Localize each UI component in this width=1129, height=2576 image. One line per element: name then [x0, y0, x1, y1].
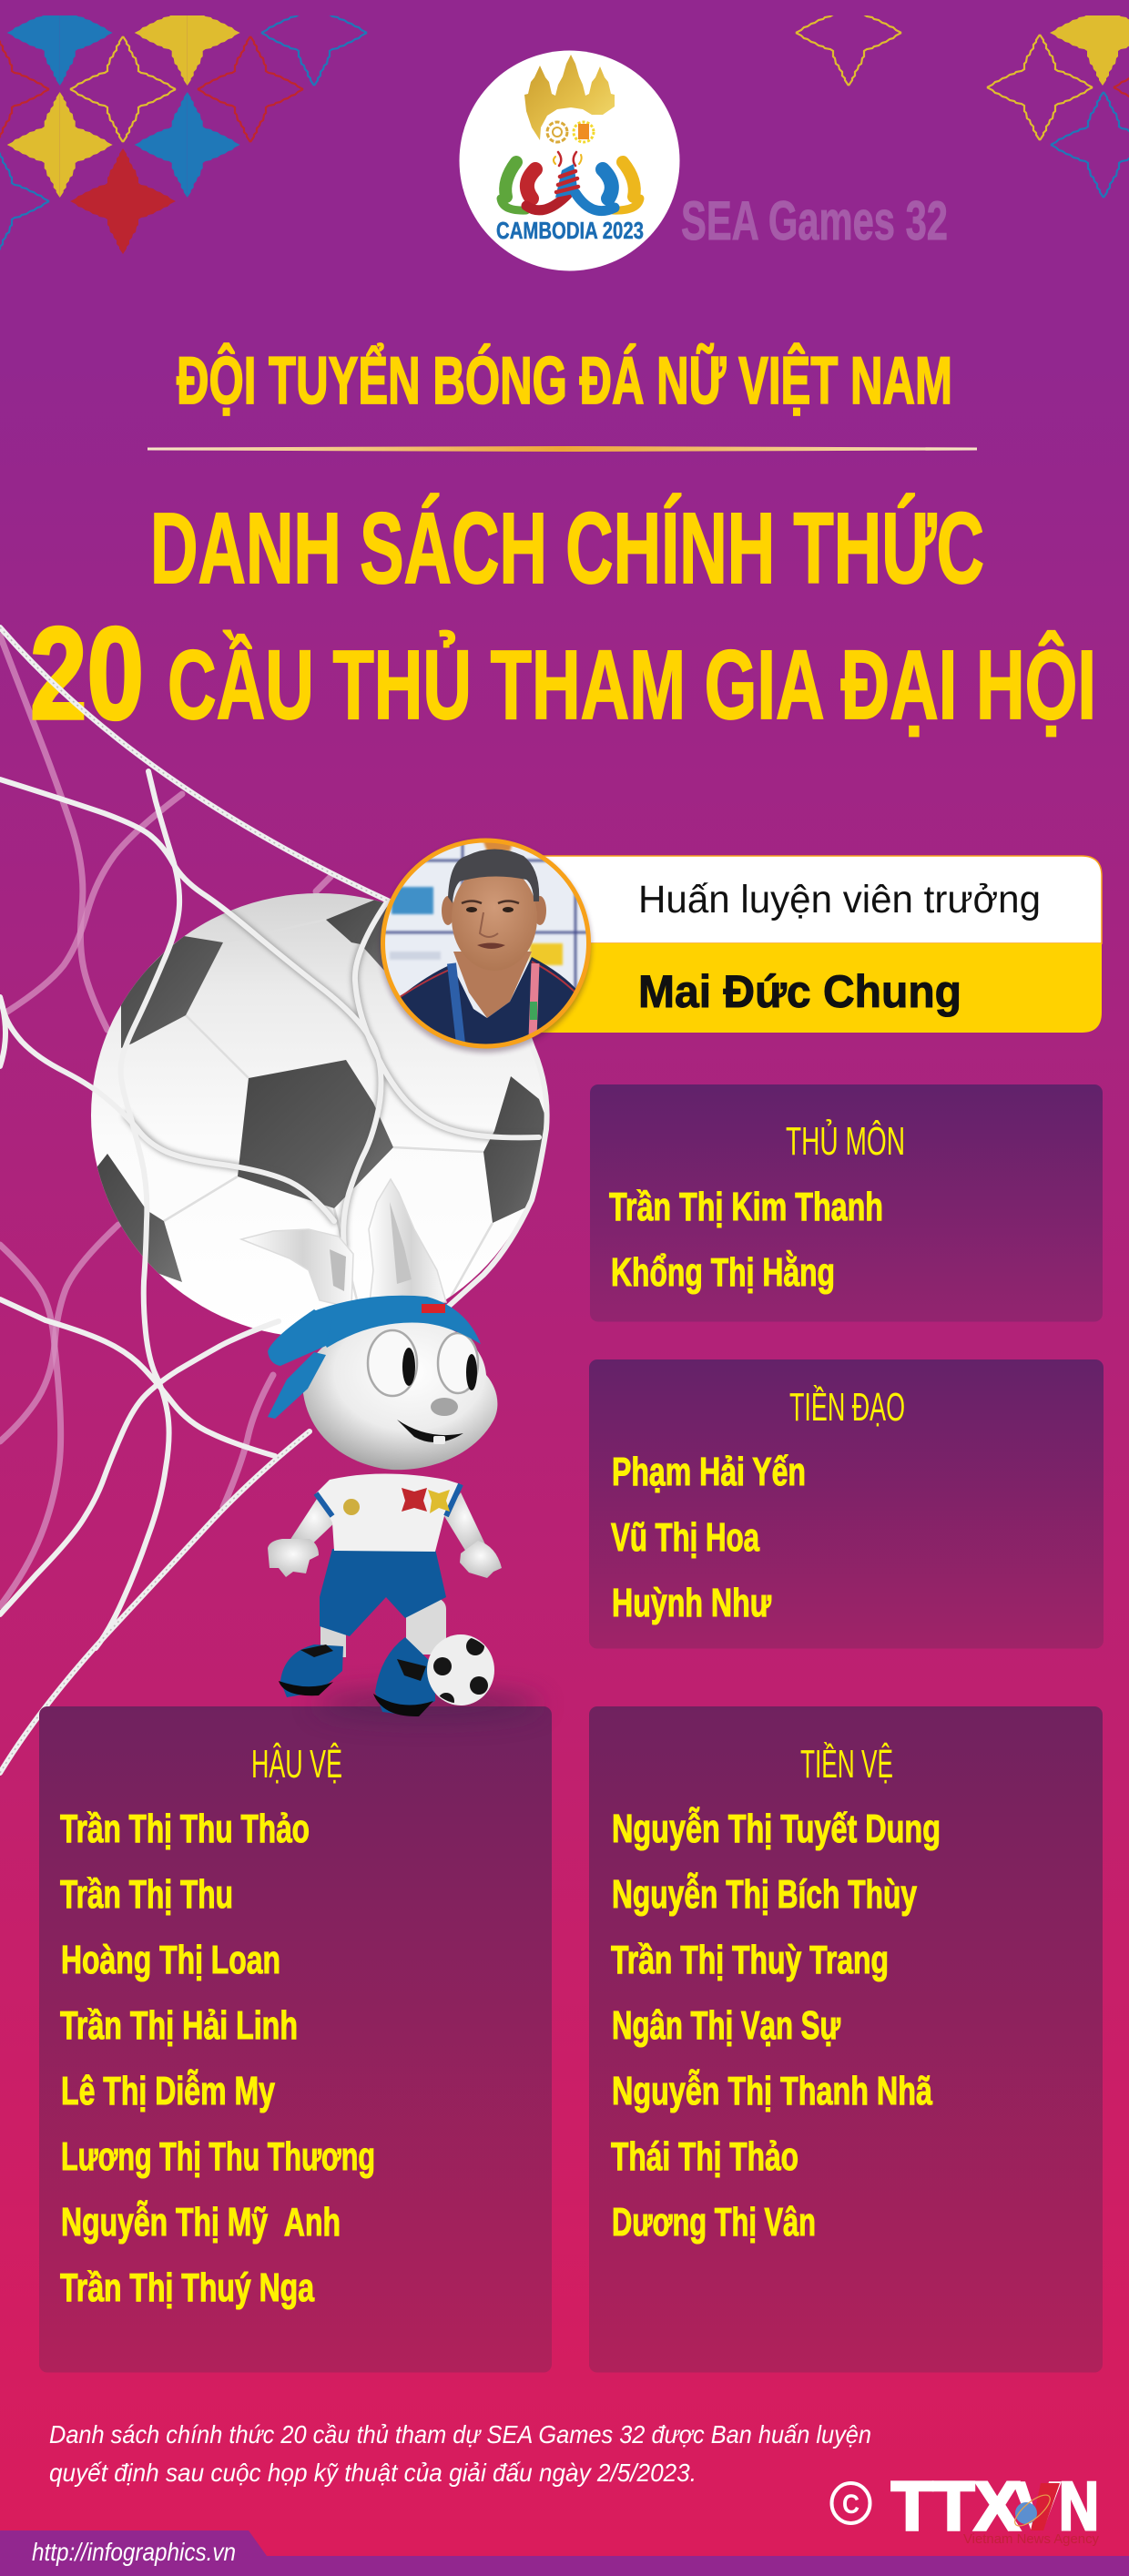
agency wordmark [891, 2468, 1099, 2547]
coach card [510, 856, 1102, 1033]
footer url: http://infographics.vn [32, 2538, 236, 2566]
heading: 20 players [30, 600, 1096, 747]
logo: TTXVN copyright [832, 2468, 1099, 2547]
mascot headband [268, 1296, 481, 1419]
player names: Khổng Thị Hằng [611, 1249, 835, 1295]
player names: Hoàng Thị Loan [61, 1938, 280, 1982]
heading divider [147, 446, 977, 452]
player names: Dương Thị Vân [612, 2200, 816, 2245]
heading: 20 players: 20 [30, 600, 144, 747]
icon: golden crown [524, 55, 615, 140]
coach portrait [381, 838, 596, 1056]
label: SEA Games 32: SEA Games 32 [681, 190, 948, 251]
player names: Trần Thị Thuý Nga [60, 2265, 314, 2310]
player names: Nguyễn Thị Thanh Nhã [612, 2068, 932, 2113]
player names: Thái Thị Thảo [611, 2134, 798, 2179]
coach name text: Mai Đức Chung [638, 966, 961, 1017]
mascot nose and mouth [397, 1398, 463, 1444]
footer band [0, 2530, 1129, 2576]
coach role text: Huấn luyện viên trưởng [638, 878, 1041, 921]
player names [60, 1807, 375, 2310]
note text: quyết định sau cuộc họp kỹ thuật của giải đấu ngày 2/5/2023. [49, 2459, 697, 2487]
mascot arms and hands [268, 1492, 502, 1578]
panel heading: TIỀN VỆ [800, 1741, 893, 1787]
mascot eyes [368, 1330, 478, 1396]
ornament: right star cluster [796, 0, 1129, 198]
player names: Phạm Hải Yến [612, 1450, 806, 1494]
player names: Trần Thị Hải Linh [60, 2003, 298, 2048]
card: role label [510, 856, 1102, 943]
panel: defenders [39, 1706, 552, 2373]
player names [611, 1806, 941, 2245]
player names [611, 1450, 806, 1625]
player names: Trần Thị Thu Thảo [60, 1807, 310, 1851]
panel heading: TIỀN ĐẠO [789, 1384, 905, 1430]
mascot head [302, 1320, 497, 1470]
mascot shirt [316, 1473, 461, 1552]
agency wordmark: V [1013, 2468, 1061, 2544]
note text [49, 2420, 871, 2487]
player names [609, 1185, 883, 1295]
panel: forwards [589, 1359, 1104, 1648]
mascot shoes [279, 1637, 435, 1716]
player names: Huỳnh Như [612, 1581, 771, 1625]
mascot legs [320, 1598, 446, 1657]
player names: Nguyễn Thị Mỹ Anh [61, 2199, 341, 2245]
panel: midfielders [589, 1706, 1103, 2373]
player names: Trần Thị Kim Thanh [609, 1185, 883, 1229]
panel heading: HẬU VỆ [251, 1742, 342, 1787]
player names: Lương Thị Thu Thương [61, 2134, 375, 2179]
icon: five naga dragons [501, 152, 640, 211]
player names: Lê Thị Diễm My [61, 2068, 275, 2113]
agency wordmark: Vietnam News Agency [963, 2531, 1099, 2547]
card: name band [510, 943, 1102, 1033]
player names: Nguyễn Thị Tuyết Dung [612, 1806, 941, 1851]
panel heading: THỦ MÔN [786, 1117, 905, 1164]
logo: Cambodia 2023 [459, 51, 679, 271]
player names: Nguyễn Thị Bích Thùy [612, 1871, 917, 1917]
panel: goalkeepers [590, 1084, 1103, 1322]
player names: Vũ Thị Hoa [611, 1515, 759, 1560]
player names: Ngân Thị Vạn Sự [612, 2003, 840, 2048]
mascot small football [427, 1634, 494, 1709]
note text: Danh sách chính thức 20 cầu thủ tham dự SEA Games 32 được Ban huấn luyện [49, 2420, 871, 2449]
illustration: rabbit mascot [241, 1179, 542, 1719]
ornament: left star cluster [0, 0, 367, 254]
player names: Trần Thị Thuỳ Trang [611, 1938, 889, 1982]
illustration: football in net [91, 893, 555, 1338]
icon: SEA Games emblems [547, 122, 594, 142]
copyright symbol [832, 2483, 870, 2523]
copyright symbol: C [842, 2489, 859, 2520]
agency wordmark: TTX [891, 2468, 1020, 2544]
logo text: CAMBODIA 2023 [496, 217, 644, 244]
agency wordmark: N [1059, 2468, 1099, 2544]
player names: Trần Thị Thu [60, 1872, 233, 1917]
net: faded back ropes [0, 636, 331, 1606]
mascot ears [241, 1179, 446, 1308]
net: front ropes [0, 627, 547, 1773]
mascot shorts [320, 1549, 446, 1636]
